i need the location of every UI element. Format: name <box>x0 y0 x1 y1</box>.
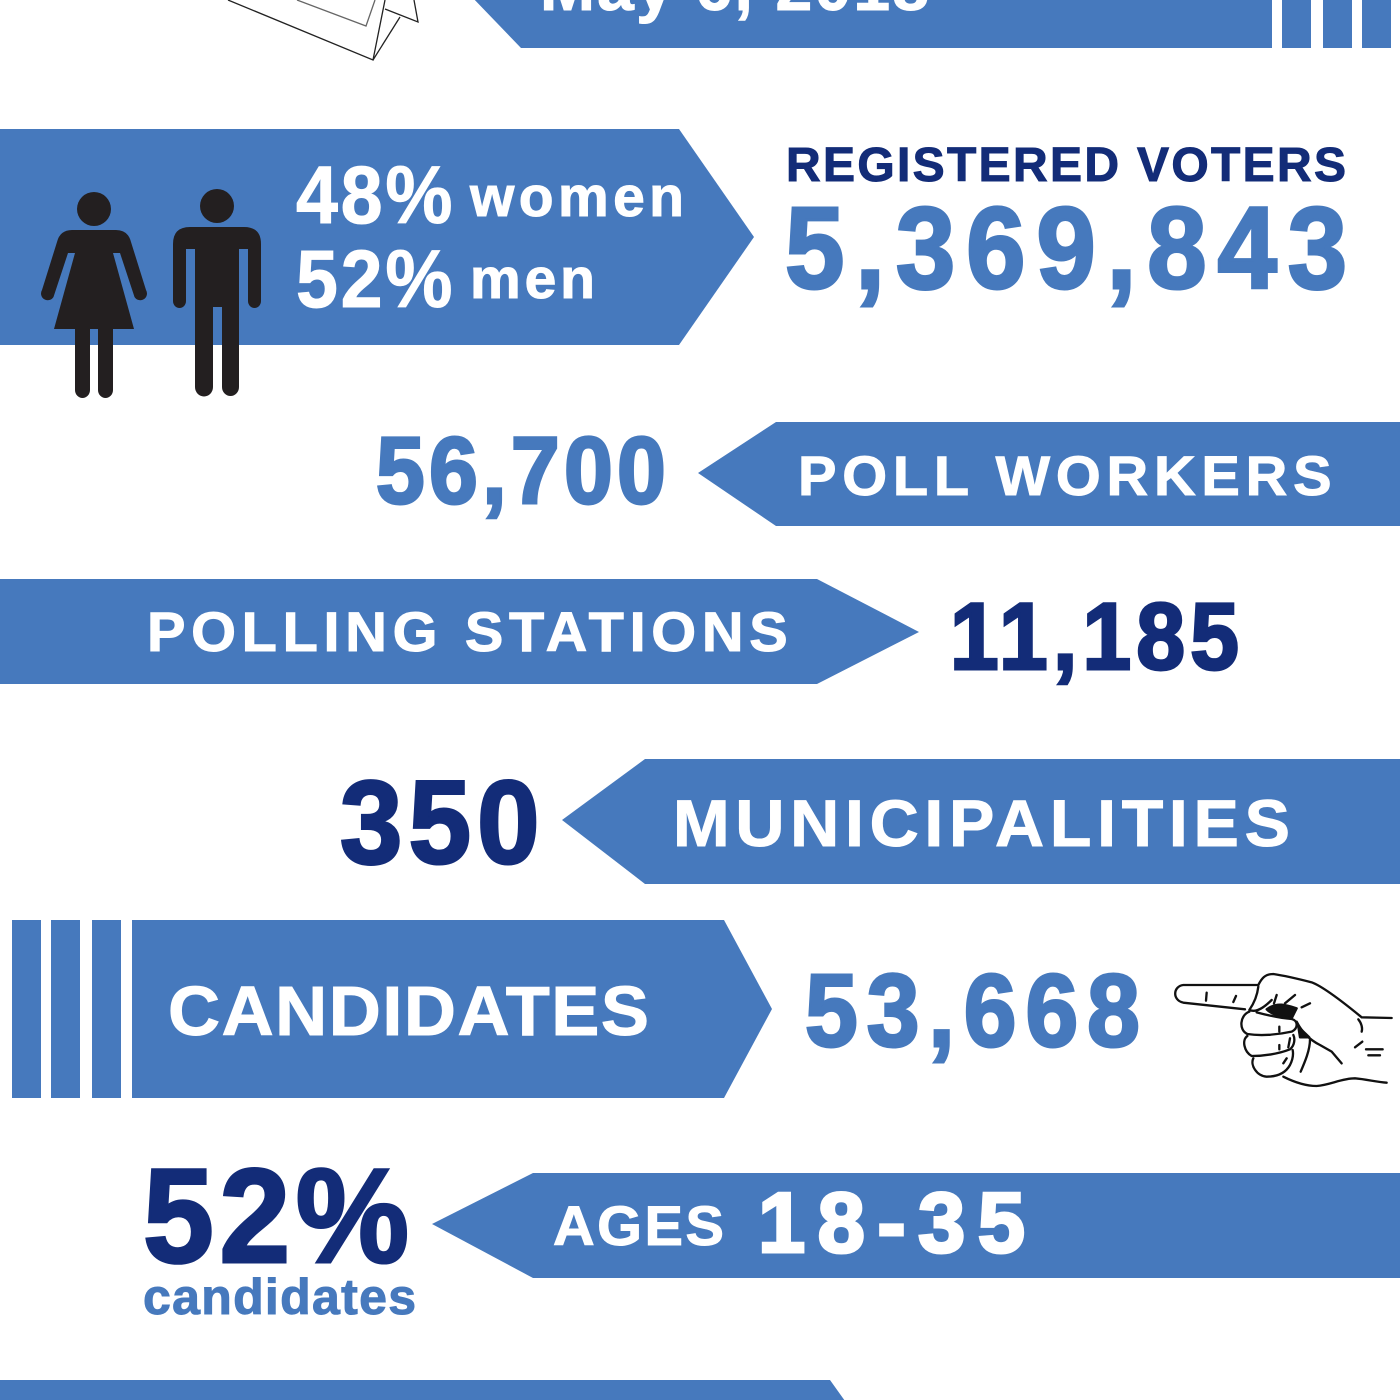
poll workers number: 56,700 <box>376 418 666 524</box>
panel: candidates banner: CANDIDATES <box>168 973 649 1051</box>
men share: 52% <box>296 233 452 325</box>
panel: poll workers banner: POLL WORKERS <box>798 446 1332 508</box>
women share: 48% <box>296 149 452 241</box>
panel: ages banner: 18-35 <box>758 1176 1025 1271</box>
panel: polling stations banner: POLLING STATIONS <box>147 602 788 664</box>
registered voters heading: REGISTERED VOTERS <box>786 139 1346 192</box>
panel: municipalities banner <box>562 759 1400 884</box>
youth share number: 52% <box>143 1141 409 1291</box>
date banner <box>470 0 1391 48</box>
panel: municipalities banner: MUNICIPALITIES <box>673 787 1290 861</box>
men label: men <box>470 247 595 311</box>
panel: candidates banner <box>12 920 772 1098</box>
icon: ballot envelope <box>228 0 418 60</box>
candidates number: 53,668 <box>805 952 1140 1068</box>
panel: ages banner: AGES <box>553 1196 724 1258</box>
municipalities number: 350 <box>340 757 540 889</box>
icon: pointing hand <box>1175 974 1392 1086</box>
polling stations number: 11,185 <box>950 584 1239 690</box>
registered voters number: 5,369,843 <box>785 183 1347 313</box>
bottom banner <box>0 1380 845 1400</box>
icon: man <box>173 189 261 397</box>
panel: polling stations banner <box>0 579 919 684</box>
panel: voters gender banner <box>0 129 754 345</box>
youth share caption: candidates <box>143 1269 416 1325</box>
panel: poll workers banner <box>698 422 1400 526</box>
panel: ages banner <box>432 1173 1400 1278</box>
icon: woman <box>41 192 147 398</box>
women label: women <box>469 165 684 229</box>
